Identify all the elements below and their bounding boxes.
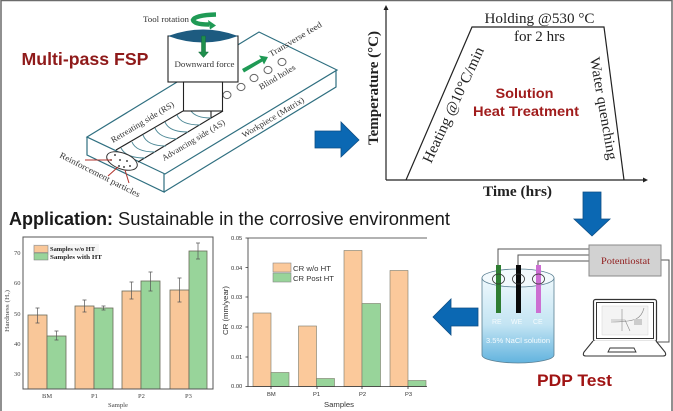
reinforcement particles pocket	[85, 148, 140, 183]
tool body	[168, 30, 238, 111]
chart labels: Time (hrs)	[483, 184, 552, 200]
FSP labels: Workpiece (Matrix)	[240, 94, 306, 140]
axis labels	[4, 250, 192, 409]
heading: solution heat treatment: Heat Treatment	[473, 103, 579, 119]
traverse arrow	[242, 56, 268, 72]
arrow: heat treatment to PDP	[574, 192, 610, 236]
heading: solution heat treatment: Solution	[496, 85, 554, 101]
panel: PDP test	[482, 245, 669, 390]
error bars	[36, 243, 200, 340]
chart labels	[366, 11, 620, 200]
chart: hardness	[4, 237, 213, 409]
axis labels: 0.02	[231, 325, 242, 331]
FSP labels: Transverse feed	[267, 19, 324, 59]
axis labels	[221, 236, 412, 409]
CR bars	[253, 250, 426, 386]
chart labels: Holding @530 °C	[484, 11, 594, 27]
beaker labels: WE	[511, 319, 523, 326]
axis labels: 0.00	[231, 384, 242, 390]
potentiostat	[589, 245, 661, 276]
axes	[384, 5, 648, 182]
axis labels: 40	[14, 341, 20, 348]
weld track	[116, 111, 223, 162]
axis labels: 70	[14, 250, 20, 257]
axis labels: 0.01	[231, 355, 242, 361]
axis labels: 30	[14, 371, 20, 378]
legend	[33, 244, 102, 261]
legend: CR Post HT	[293, 274, 334, 283]
axis labels: 0.04	[231, 266, 243, 272]
downward force arrow	[198, 36, 208, 58]
chart labels: Heating @10°C/min	[420, 44, 488, 166]
FSP labels: Tool rotation	[143, 14, 190, 24]
arrow: PDP to charts	[433, 299, 478, 335]
frame	[23, 237, 213, 389]
hardness bars	[28, 251, 207, 389]
axes	[246, 238, 427, 389]
axis labels: P2	[138, 393, 145, 400]
electrodes	[496, 265, 501, 313]
beaker labels: CE	[533, 319, 543, 326]
chart labels: for 2 hrs	[514, 29, 565, 45]
heading: application: Sustainable in the corrosive environment	[118, 208, 450, 229]
heading: application: Application:	[9, 208, 113, 229]
axis labels: P1	[313, 392, 320, 398]
panel: heat treatment chart	[366, 5, 648, 200]
axis labels: Hardness (Hᵥ)	[4, 290, 11, 332]
chart: corrosion rate	[221, 236, 427, 409]
axis labels: Sample	[108, 402, 128, 409]
temperature profile	[406, 27, 624, 180]
axis labels: 0.03	[231, 295, 242, 301]
heading: solution heat treatment	[473, 85, 579, 119]
heading: Multi-pass FSP: Multi-pass FSP	[22, 49, 149, 69]
workpiece plate	[87, 32, 337, 192]
axis labels: CR (mm/year)	[221, 285, 230, 335]
axis labels: 60	[14, 280, 20, 287]
beaker labels: 3.5% NaCl solution	[486, 338, 550, 345]
FSP labels	[58, 14, 324, 199]
tool rotation arrow	[193, 14, 216, 30]
axis labels: P2	[359, 392, 366, 398]
FSP labels: Blind holes	[257, 62, 297, 92]
axis labels: 50	[14, 311, 20, 318]
axis labels: P1	[91, 393, 98, 400]
FSP labels: Downward force	[174, 59, 235, 69]
arrow: FSP to heat treatment	[315, 122, 359, 157]
heading: PDP test: PDP Test	[537, 372, 613, 390]
beaker labels: RE	[492, 319, 502, 326]
axis labels: Samples	[324, 400, 354, 409]
wires	[498, 249, 669, 342]
chart labels: Temperature (°C)	[366, 31, 382, 145]
panel: multi-pass FSP	[22, 14, 337, 199]
legend	[273, 263, 334, 283]
axis labels: BM	[42, 393, 52, 400]
axis labels: P3	[405, 392, 412, 398]
axis labels: BM	[267, 392, 276, 398]
blind holes	[223, 58, 286, 99]
beaker labels	[486, 319, 550, 345]
axis labels: P3	[185, 393, 192, 400]
laptop	[583, 300, 666, 356]
FSP labels: Advancing side (AS)	[160, 117, 227, 163]
FSP labels: Retreating side (RS)	[109, 99, 176, 145]
legend: Samples w/o HT	[50, 247, 95, 253]
legend: Samples with HT	[50, 255, 102, 261]
FSP labels: Reinforcement particles	[58, 150, 142, 199]
chart labels: Water quenching	[586, 56, 620, 161]
axis labels: 0.05	[231, 236, 242, 242]
beaker	[482, 278, 554, 363]
legend: CR w/o HT	[293, 264, 331, 273]
potentiostat: Potentiostat	[601, 257, 650, 267]
